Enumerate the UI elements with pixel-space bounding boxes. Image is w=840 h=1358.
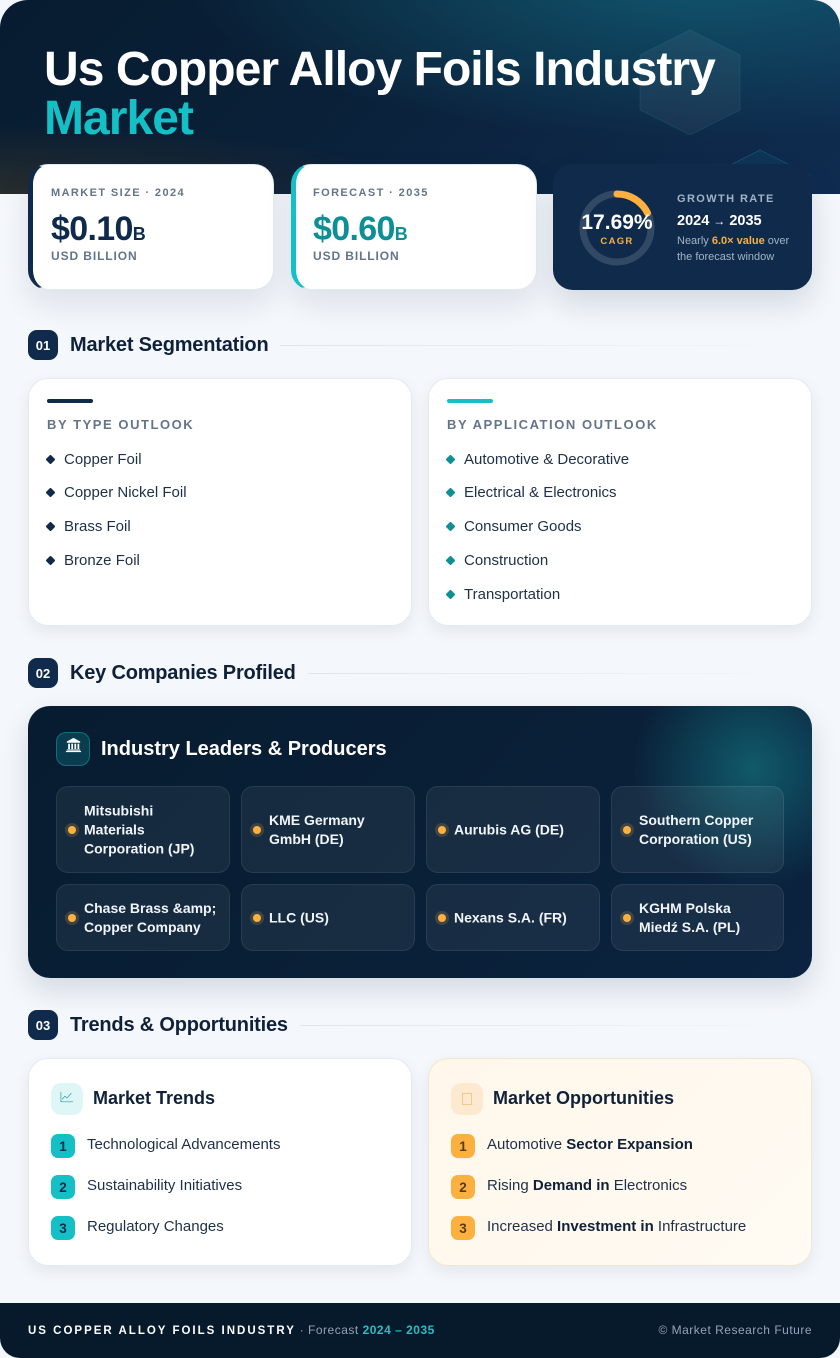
company: Nexans S.A. (FR) — [454, 909, 567, 925]
company — [56, 884, 230, 951]
title: Us Copper Alloy Foils Industry — [44, 43, 715, 96]
icon: line chart — [51, 1083, 83, 1115]
growth rate text: GROWTH RATE — [677, 193, 775, 205]
company: Southern Copper — [639, 812, 753, 828]
company: Corporation (JP) — [84, 840, 194, 856]
item number — [451, 1175, 475, 1199]
footer credit: © Market Research Future — [658, 1323, 812, 1337]
company: KGHM Polska — [639, 900, 731, 916]
stat card: growth rate — [553, 164, 812, 290]
header banner — [0, 0, 840, 194]
company: Corporation (US) — [639, 830, 752, 846]
item number — [451, 1134, 475, 1158]
company — [426, 786, 600, 873]
item number — [51, 1216, 75, 1240]
item: Copper Foil — [64, 451, 142, 468]
CAGR ring — [580, 190, 654, 266]
company — [611, 786, 784, 873]
company: Aurubis AG (DE) — [454, 821, 564, 837]
item: Increased Investment in Infrastructure — [487, 1218, 746, 1235]
item: Consumer Goods — [464, 518, 582, 535]
stat card: market size — [28, 164, 274, 290]
item: Sustainability Initiatives — [87, 1177, 242, 1194]
footer — [0, 1303, 840, 1358]
item number — [451, 1216, 475, 1240]
growth description: the forecast window — [677, 251, 774, 263]
company: Chase Brass &amp; — [84, 900, 216, 916]
item number: 3 — [59, 1221, 67, 1236]
item: Construction — [464, 552, 548, 569]
item: Automotive Sector Expansion — [487, 1136, 693, 1153]
item: Rising Demand in Electronics — [487, 1177, 687, 1194]
section badge 02: 02 — [36, 666, 50, 681]
growth description — [677, 235, 789, 263]
decorative hexagons — [640, 30, 810, 176]
item: Technological Advancements — [87, 1136, 280, 1153]
company: Mitsubishi — [84, 802, 153, 818]
company: GmbH (DE) — [269, 830, 344, 846]
stat card: forecast: $0.60B — [313, 210, 408, 248]
panel heading: Market Opportunities — [493, 1088, 674, 1108]
section badge 01 — [28, 330, 58, 360]
title — [44, 43, 716, 145]
stat card: market size: MARKET SIZE · 2024 — [51, 187, 185, 199]
item: Copper Nickel Foil — [64, 484, 187, 501]
panel: by application outlook — [428, 378, 812, 626]
company: Materials — [84, 821, 145, 837]
item: Electrical & Electronics — [464, 484, 617, 501]
company: KME Germany — [269, 812, 365, 828]
stat card: forecast — [291, 164, 537, 290]
company: Miedź S.A. (PL) — [639, 918, 740, 934]
icon: missing glyph box — [451, 1083, 483, 1115]
company — [611, 884, 784, 951]
panel heading: BY APPLICATION OUTLOOK — [447, 417, 658, 432]
item: Regulatory Changes — [87, 1218, 224, 1235]
icon: institution — [56, 732, 90, 766]
company: LLC (US) — [269, 909, 329, 925]
item number: 3 — [459, 1221, 467, 1236]
panel: market opportunities — [428, 1058, 812, 1266]
company: Copper Company — [84, 918, 201, 934]
company — [241, 884, 415, 951]
item number — [51, 1175, 75, 1199]
growth description: Nearly 6.0× value over — [677, 235, 789, 247]
item number: 2 — [59, 1180, 67, 1195]
stat card: market size: $0.10B — [51, 210, 146, 248]
section heading: key companies: Key Companies Profiled — [70, 662, 296, 684]
item number: 1 — [459, 1139, 467, 1154]
item: Transportation — [464, 586, 560, 603]
stat card: market size: USD BILLION — [51, 249, 138, 263]
title: Market — [44, 92, 193, 145]
panel: by type outlook — [28, 378, 412, 626]
CAGR label: CAGR — [600, 236, 634, 247]
company — [241, 786, 415, 873]
item: Automotive & Decorative — [464, 451, 629, 468]
section badge 03 — [28, 1010, 58, 1040]
item: Brass Foil — [64, 518, 131, 535]
panel: industry leaders — [28, 706, 812, 978]
footer title: US COPPER ALLOY FOILS INDUSTRY · Forecast 2024 – 2035 — [28, 1323, 435, 1337]
section badge 02 — [28, 658, 58, 688]
year range: 2024 → 2035 — [677, 213, 762, 229]
item number: 1 — [59, 1139, 67, 1154]
section badge 01: 01 — [36, 338, 50, 353]
item number — [51, 1134, 75, 1158]
stat card: forecast: USD BILLION — [313, 249, 400, 263]
stat card: forecast: FORECAST · 2035 — [313, 187, 429, 199]
item number: 2 — [459, 1180, 467, 1195]
item: Bronze Foil — [64, 552, 140, 569]
panel heading: BY TYPE OUTLOOK — [47, 417, 194, 432]
company — [56, 786, 230, 873]
company — [426, 884, 600, 951]
section heading: market segmentation: Market Segmentation — [70, 334, 268, 356]
section badge 03: 03 — [36, 1018, 50, 1033]
panel heading: Industry Leaders & Producers — [101, 738, 387, 760]
CAGR value: 17.69% — [581, 211, 653, 234]
panel heading: Market Trends — [93, 1088, 215, 1108]
section heading: trends: Trends & Opportunities — [70, 1014, 288, 1036]
panel: market trends — [28, 1058, 412, 1266]
